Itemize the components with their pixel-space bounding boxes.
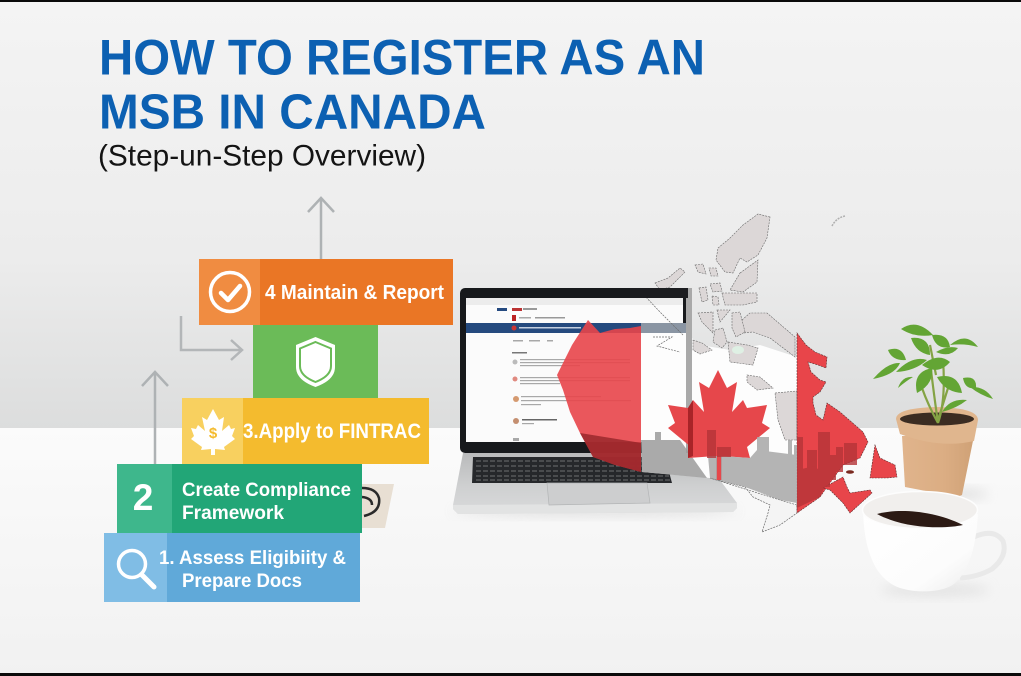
shield inner line bbox=[300, 342, 331, 382]
arrow: top up arrow bbox=[308, 198, 334, 259]
northern coast lines bbox=[644, 295, 683, 352]
pot body bbox=[902, 436, 974, 497]
title: HOW TO REGISTER AS AN bbox=[99, 30, 705, 86]
cup body bbox=[863, 510, 978, 591]
laptop base bbox=[453, 453, 737, 514]
leaves bbox=[873, 325, 993, 412]
stems bbox=[922, 345, 948, 423]
title: MSB IN CANADA bbox=[99, 86, 486, 140]
icon: shield bbox=[296, 337, 335, 387]
step 2: create compliance framework bbox=[117, 464, 362, 533]
coffee bbox=[877, 511, 963, 527]
outer southern border bbox=[710, 478, 797, 532]
notebook and glasses bbox=[360, 484, 394, 528]
city skyline gray bbox=[708, 437, 797, 503]
pot rim bbox=[896, 407, 978, 444]
step 3 label: 3.Apply to FINTRAC bbox=[243, 420, 421, 443]
step 2 label: Create Compliance bbox=[182, 479, 351, 501]
keyboard keys bbox=[476, 461, 670, 480]
icon: maple leaf with dollar: $ bbox=[209, 425, 218, 442]
bottom frame bar bbox=[0, 673, 1021, 676]
plant bbox=[873, 325, 993, 498]
map east red section bbox=[797, 333, 868, 513]
lid top over map bbox=[630, 288, 688, 298]
plant shadow bbox=[936, 490, 988, 498]
step 1 label: Prepare Docs bbox=[182, 570, 302, 592]
base front lip bbox=[453, 503, 737, 514]
cup handle bbox=[960, 533, 1004, 578]
site alert text bbox=[512, 326, 581, 330]
step 3: apply to FINTRAC bbox=[182, 398, 429, 464]
step 4 label: 4 Maintain & Report bbox=[265, 282, 444, 304]
step 4: maintain and report bbox=[199, 259, 453, 325]
laptop bbox=[453, 288, 737, 515]
site blue band bbox=[466, 323, 686, 333]
coffee cup bbox=[862, 492, 1004, 595]
step 2 number: 2 bbox=[133, 477, 153, 518]
step 1 label bbox=[159, 547, 346, 592]
icon: magnifier bbox=[118, 550, 154, 587]
leaf dark laptop edge bbox=[688, 400, 693, 458]
laptop lid bbox=[460, 288, 688, 453]
small distant island bbox=[832, 216, 845, 226]
map maritimes bbox=[823, 477, 872, 513]
laptop screen bbox=[466, 298, 683, 442]
laptop shadow bbox=[453, 507, 737, 515]
map dark coast over keyboard bbox=[580, 433, 641, 472]
pale green lake patch bbox=[732, 346, 744, 354]
arctic islands bbox=[655, 214, 797, 440]
leaf stem bbox=[717, 455, 721, 480]
left skyline bbox=[641, 432, 707, 478]
background table bbox=[0, 428, 1021, 676]
arrow: left up arrow bbox=[142, 372, 168, 464]
map of Canada with flag bbox=[557, 214, 897, 532]
prince edward island bbox=[846, 470, 854, 474]
site header bbox=[497, 308, 565, 321]
site tabs and content bbox=[512, 340, 631, 441]
top frame bar bbox=[0, 0, 1021, 2]
soil bbox=[900, 412, 974, 426]
map newfoundland bbox=[870, 445, 897, 478]
maple leaf bbox=[668, 370, 770, 480]
map west red section bbox=[557, 320, 641, 472]
title bbox=[99, 30, 705, 140]
icon: maple leaf with dollar bbox=[191, 409, 235, 455]
map white centre section bbox=[641, 333, 797, 505]
trackpad bbox=[547, 483, 650, 505]
background wall bbox=[0, 0, 1021, 429]
icon: check circle bbox=[210, 272, 250, 312]
screen band through map bbox=[641, 323, 686, 333]
arrow: elbow arrow bbox=[181, 316, 242, 360]
city skyline red bbox=[707, 430, 857, 508]
browser bar bbox=[466, 298, 683, 305]
cup rim bbox=[862, 492, 978, 528]
step 2 label bbox=[182, 479, 351, 524]
step 1 label: 1. Assess Eligibiity & bbox=[159, 547, 346, 569]
laptop lid edge through map bbox=[686, 288, 692, 453]
subtitle: (Step-un-Step Overview) bbox=[98, 140, 426, 172]
cup shadow bbox=[880, 585, 990, 595]
step 2 label: Framework bbox=[182, 502, 284, 524]
step 1: assess eligibility bbox=[104, 533, 360, 602]
keyboard bbox=[472, 457, 672, 483]
step: green shield block bbox=[253, 325, 378, 398]
